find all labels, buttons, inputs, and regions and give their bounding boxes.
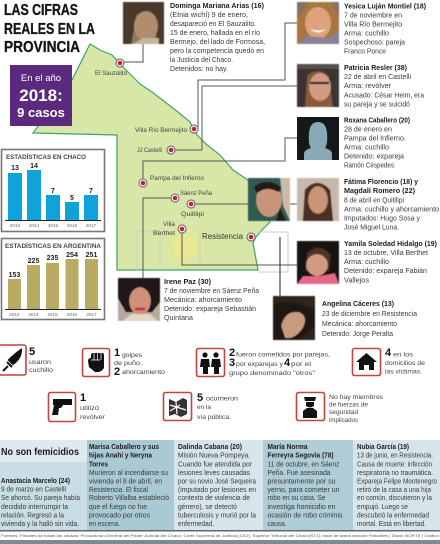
- Patricia text: su pareja y se suicidó: [344, 102, 410, 108]
- stat: fist: 1: [114, 347, 120, 359]
- case: Marisa Caballero: en escena.: [89, 521, 120, 528]
- case: Nubia García: en común, discutieron y la: [357, 495, 432, 502]
- bar chart: Chaco statistics: 5: [70, 195, 74, 202]
- case: Anastacia Marcelo: [1, 478, 80, 528]
- Dominga text: la Justicia del Chaco.: [170, 57, 233, 64]
- case: Anastacia Marcelo: vivienda y la halló sin vida.: [1, 521, 79, 528]
- stat: security officer: No hay miembros: [329, 394, 384, 401]
- case: María Norma Ferreyra Segovia: ocasión de robo criminis: [268, 512, 343, 520]
- Patricia text: 22 de abril en Castelli: [344, 74, 411, 81]
- stat: gun: utilizó: [80, 405, 99, 412]
- case: Anastacia Marcelo: decidido interrumpir la: [1, 504, 68, 511]
- case: Marisa Caballero: Resistencia. El fiscal: [89, 487, 148, 494]
- bar chart: Argentina statistics: ESTADÍSTICAS EN ARGENTINA: [5, 241, 101, 250]
- Dominga text: Bermejo, del lado de Formosa,: [170, 39, 265, 46]
- stat: street map: [164, 392, 238, 421]
- case: Dalinda Cabana: Dalinda Cabana (20): [178, 444, 242, 451]
- case: Marisa Caballero: Roberto Villalba estableció: [89, 495, 169, 502]
- heading: No son femicidios: No son femicidios: [1, 447, 79, 458]
- stat: security officer: implicados: [329, 417, 359, 424]
- case: Dalinda Cabana: Misión Nueva Pompeya.: [178, 452, 250, 460]
- case: María Norma Ferreyra Segovia: robo en su casa. Se: [268, 495, 326, 502]
- title: REALES EN LA: [4, 21, 95, 38]
- case: Dalinda Cabana: género), se detectó: [178, 504, 237, 511]
- photo: Roxana silhouette: [297, 117, 339, 160]
- bar chart: Argentina statistics: 2014: [28, 312, 39, 317]
- photo: Irene: [117, 277, 161, 322]
- title: [4, 2, 95, 56]
- case: Dalinda Cabana: Cuando fue atendida por: [178, 462, 253, 468]
- stat: couple: [196, 347, 330, 377]
- stat: couple: grupo denominado "otros": [229, 370, 316, 377]
- Irene text: Mecánica: ahorcamiento: [164, 297, 242, 304]
- map of Chaco province: [33, 44, 288, 272]
- case: María Norma Ferreyra Segovia: María Norma: [268, 444, 308, 451]
- Roxana text: Detenido: expareja: [344, 154, 404, 160]
- Fátima and Magdalí text: [344, 179, 439, 232]
- bar chart: Argentina statistics: 251: [86, 252, 97, 259]
- case: Dalinda Cabana: (imputado por lesiones en: [178, 487, 256, 494]
- Dominga text: (Etnia wichí) 9 de enero,: [170, 12, 248, 19]
- photo: Magdalí: [296, 178, 340, 222]
- title: LAS CIFRAS: [4, 2, 78, 19]
- stat: knife: cuchillo: [29, 367, 53, 374]
- case: Marisa Caballero: hijas Anahí y Neryna: [89, 452, 152, 460]
- stat: street map: en la: [197, 404, 211, 411]
- case: Marisa Caballero: [89, 444, 169, 528]
- map city labels: JJ Castelli: [137, 147, 162, 154]
- case: Nubia García: empujó. Luego se: [357, 504, 408, 511]
- Fátima and Magdalí text: Magdalí Romero (22): [344, 188, 415, 195]
- case: Dalinda Cabana: tuberculosis y murió por la: [178, 512, 256, 520]
- photo: Fátima: [247, 177, 291, 222]
- case: María Norma Ferreyra Segovia: presuntamente por su: [268, 478, 336, 486]
- bar chart: Chaco statistics: ESTADÍSTICAS EN CHACO: [6, 152, 86, 161]
- stat: house: las víctimas.: [385, 368, 422, 376]
- Dominga text: Detenidos: no hay.: [170, 66, 228, 73]
- case: Dalinda Cabana: enfermedad.: [178, 521, 214, 528]
- Yesica text: Arma: cuchillo: [344, 30, 389, 38]
- stat: house: 4: [385, 347, 392, 359]
- Angelina text: Detenido: Jorge Peralta: [322, 331, 393, 338]
- Patricia text: Arma: revólver: [344, 83, 392, 90]
- stat: knife: usaron: [29, 359, 51, 366]
- Irene text: Quintana: [164, 315, 193, 322]
- case: Anastacia Marcelo: Anastacia Marcelo (24): [1, 478, 70, 485]
- watermark logo: [137, 229, 288, 272]
- panel: no son femicidios background: [0, 440, 440, 544]
- case: María Norma Ferreyra Segovia: 11 de octubre, en Sáenz: [268, 462, 340, 468]
- stat: knife: [0, 345, 53, 375]
- Yamila text: Vallejos: [344, 278, 370, 284]
- Yamila text: Yamila Soledad Hidalgo (19): [344, 241, 437, 248]
- stat: street map: ocurrieron: [206, 396, 238, 402]
- Roxana text: Pampa del Infierno.: [344, 136, 406, 142]
- Angelina text: 23 de diciembre en Resistencia: [322, 311, 417, 318]
- Irene text: [164, 279, 259, 322]
- map city labels: Pampa del Infierno: [150, 175, 205, 182]
- Yesica text: Yesica Luján Montiel (18): [344, 4, 426, 10]
- Yesica text: [344, 4, 426, 56]
- case: Marisa Caballero: vivienda el 8 de abril, en: [89, 478, 162, 486]
- map city labels: Villa: [163, 221, 176, 228]
- bar chart: Chaco statistics: 2013: [10, 223, 21, 228]
- Dominga text: desapareció en El Sauzalito.: [170, 21, 256, 28]
- stat: house: [352, 347, 425, 376]
- Fátima and Magdalí text: José Miguel Luna.: [344, 224, 399, 232]
- stat: couple: por exparejas y: [236, 361, 284, 368]
- case: Marisa Caballero: Torres: [89, 462, 108, 468]
- stat: gun: [48, 392, 106, 422]
- stat: couple: 4: [284, 357, 291, 369]
- photo: Dominga: [122, 1, 165, 45]
- map city labels: Resistencia: [202, 232, 244, 241]
- bar chart: Chaco statistics: 14: [30, 163, 38, 170]
- stat: security officer: de fuerzas de: [329, 402, 368, 408]
- case: María Norma Ferreyra Segovia: [268, 444, 343, 528]
- case: Nubia García: Nubia García (19): [357, 444, 409, 451]
- case: María Norma Ferreyra Segovia: yerno, para cometer un: [268, 487, 340, 494]
- Angelina text: Angelina Cáceres (13): [322, 301, 394, 308]
- title: PROVINCIA: [4, 39, 80, 56]
- Yesica text: Franco Ponce: [344, 48, 386, 56]
- case: Dalinda Cabana: contexto de violencia de: [178, 495, 250, 502]
- case: Anastacia Marcelo: relación. Regresó a la: [1, 512, 64, 520]
- photo: Yamila: [296, 240, 340, 285]
- stat: fist: [82, 347, 165, 378]
- purple box: 2018 cases: [10, 65, 72, 126]
- stat: fist: golpes: [122, 352, 143, 359]
- stat: street map: 5: [197, 392, 203, 404]
- bar chart: Chaco statistics: 2015: [48, 223, 59, 228]
- Roxana text: 28 de enero en: [344, 126, 392, 134]
- stat: fist: ahorcamiento: [122, 369, 165, 376]
- stat: security officer: [296, 392, 384, 424]
- case: Anastacia Marcelo: Se ahorcó. Su pareja había: [1, 495, 80, 502]
- bar chart: Chaco statistics: 13: [11, 165, 19, 172]
- Roxana text: [344, 118, 410, 170]
- Patricia text: Patricia Resler (38): [344, 65, 407, 72]
- case: Dalinda Cabana: [178, 444, 256, 528]
- map city labels: Villa Río Bermejito: [135, 127, 188, 134]
- case: Dalinda Cabana: por su novio José Sequeira: [178, 478, 256, 486]
- Dominga text: [170, 3, 265, 73]
- case: Marisa Caballero: Murieron al incendiarse su: [89, 470, 168, 477]
- photo: Angelina: [272, 295, 316, 341]
- Yesica text: Sospechoso: pareja: [344, 40, 405, 46]
- Angelina text: [322, 301, 417, 338]
- case: María Norma Ferreyra Segovia: Ferreyra Segovia (78): [268, 452, 334, 460]
- stat: gun: 1: [80, 392, 86, 404]
- stat: fist: de puño.: [114, 360, 142, 367]
- map city markers: [116, 59, 255, 241]
- bar chart: Argentina statistics: 254: [66, 252, 78, 259]
- Yamila text: [344, 241, 437, 284]
- case: Dalinda Cabana: lesiones leves causadas: [178, 470, 250, 477]
- case: Nubia García: descubrió la enfermedad: [357, 512, 429, 520]
- stat: gun: revólver: [80, 414, 106, 421]
- photo: Yesica: [296, 1, 340, 45]
- stat: house: en los: [393, 352, 414, 358]
- stat: couple: por el: [291, 361, 312, 368]
- bar chart: Chaco statistics: 2014: [29, 223, 40, 228]
- bar chart: Argentina statistics: 153: [9, 272, 20, 279]
- case: Marisa Caballero: Marisa Caballero y sus: [89, 444, 159, 451]
- case: Marisa Caballero: que el fuego no fue: [89, 504, 147, 511]
- bar chart: Argentina statistics: 225: [28, 258, 39, 265]
- stat: couple: 2: [229, 347, 235, 359]
- bar chart: Chaco statistics: 2017: [86, 223, 97, 228]
- bar chart: Argentina statistics: 235: [47, 255, 58, 262]
- case: María Norma Ferreyra Segovia: causa.: [268, 521, 287, 528]
- purple box: 2018 cases: 9 casos: [17, 105, 65, 120]
- case: Nubia García: Causa de muerte: infección: [357, 462, 432, 468]
- Yamila text: 13 de octubre, Villa Berthet: [344, 250, 428, 257]
- Patricia text: [344, 65, 424, 108]
- photo: Patricia: [296, 63, 340, 108]
- bar chart: Argentina statistics: 2016: [67, 312, 78, 317]
- stat: knife: 5: [29, 346, 35, 358]
- bar chart: Chaco statistics: 7: [89, 188, 93, 195]
- stat: house: domicilios de: [385, 360, 425, 367]
- case: Nubia García: respiratoria no traumática.: [357, 470, 433, 477]
- Fátima and Magdalí text: Arma: cuchillo y ahorcamiento: [344, 206, 439, 214]
- Dominga text: pero la competencia quedó en: [170, 48, 264, 55]
- bar chart: Argentina statistics: [2, 238, 104, 320]
- stat: street map: vía pública.: [197, 414, 231, 421]
- map city labels: [95, 70, 244, 241]
- purple box: 2018 cases: 2018:: [19, 86, 63, 105]
- case: Nubia García: [357, 444, 437, 528]
- Patricia text: Acusado: César Heim, era: [344, 92, 424, 100]
- map city labels: Sáenz Peña: [180, 190, 213, 197]
- Yamila text: Arma: cuchillo: [344, 259, 389, 266]
- purple box: 2018 cases: En el año: [21, 73, 61, 84]
- leader lines: [123, 23, 297, 296]
- map city labels: Quitilipi: [181, 211, 204, 218]
- case: Anastacia Marcelo: 9 de marzo en Castelli: [1, 486, 66, 494]
- Roxana text: Roxana Caballero (20): [344, 118, 410, 124]
- Fátima and Magdalí text: Fátima Florencio (18) y: [344, 179, 418, 186]
- case: María Norma Ferreyra Segovia: investiga homicidio en: [268, 504, 336, 511]
- Dominga text: 15 de enero, hallada en el río: [170, 30, 260, 37]
- Fátima and Magdalí text: 8 de abril en Quitilipi: [344, 198, 404, 204]
- map city labels: El Sauzalito: [95, 70, 128, 77]
- case: Nubia García: mortal. Está en libertad.: [357, 521, 426, 528]
- sources line: Fuentes: Fiscales de todas las causas, Procuración General del Poder Judicial del Chaco, Corte Suprema de Justicia (CSJ), Superior Tribunal del Chaco(STJ), base de datos sección Policiales | Diario NORTE | Gráfico: [1, 534, 439, 538]
- bar chart: Chaco statistics: 7: [51, 188, 55, 195]
- stat: couple: fueron cometidos por parejas,: [236, 352, 330, 358]
- Dominga text: Dominga Mariana Arias (16): [170, 3, 264, 10]
- Roxana text: Arma: cuchillo: [344, 144, 389, 152]
- Irene text: 7 de noviembre en Sáenz Peña: [164, 288, 259, 295]
- bar chart: Argentina statistics: 2013: [9, 312, 20, 317]
- stat: security officer: seguridad: [329, 409, 358, 416]
- bar chart: Argentina statistics: 2017: [86, 312, 97, 317]
- Irene text: Irene Paz (30): [164, 279, 211, 286]
- Yamila text: Detenido: expareja Fabián: [344, 268, 427, 275]
- map city labels: Berthet: [153, 230, 175, 237]
- case: María Norma Ferreyra Segovia: Peña. Fue asesinada: [268, 470, 331, 477]
- bar chart: Chaco statistics: 2016: [67, 223, 78, 228]
- Roxana text: Ramón Céspedes: [344, 162, 394, 170]
- Fátima and Magdalí text: Imputados: Hugo Sosa y: [344, 216, 420, 222]
- case: Nubia García: retiró de la casa a una hija: [357, 487, 431, 494]
- stat: couple: 3: [229, 357, 235, 369]
- Irene text: Detenido: expareja Sebastián: [164, 306, 256, 313]
- case: Marisa Caballero: provocado por otros: [89, 512, 150, 520]
- Yesica text: 7 de noviembre en: [344, 12, 402, 20]
- bar chart: Chaco statistics: [2, 150, 104, 232]
- Angelina text: Mecánica: ahorcamiento: [322, 321, 397, 328]
- Yesica text: Villa Río Bermejito: [344, 22, 402, 28]
- bar chart: Argentina statistics: 2015: [47, 312, 58, 317]
- stat: fist: 2: [114, 366, 120, 378]
